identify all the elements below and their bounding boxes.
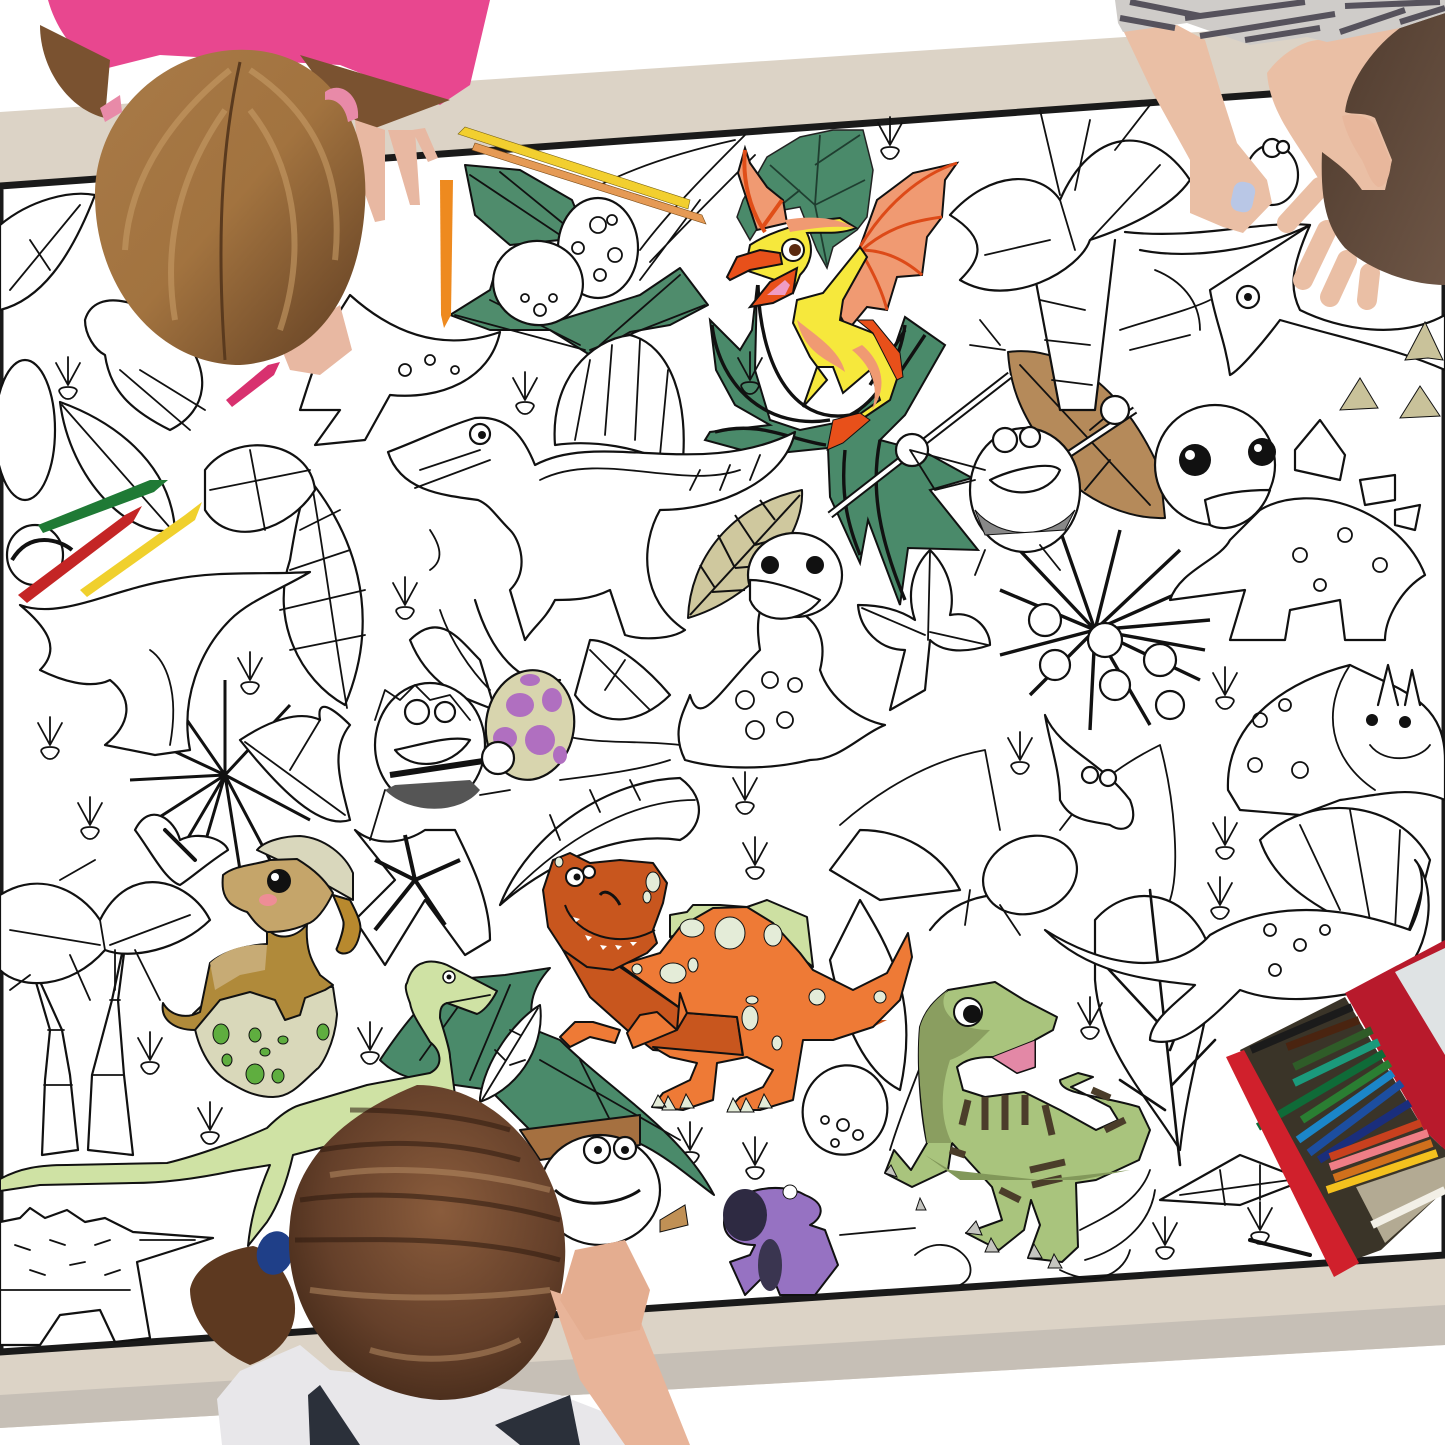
ponytail xyxy=(190,1246,295,1365)
caveman with paintbrush right xyxy=(830,375,1135,575)
plant: spiky burst with berries xyxy=(1000,530,1210,730)
baby stegosaurus xyxy=(1155,405,1425,640)
box interior xyxy=(1240,997,1445,1265)
plant: palm tree left xyxy=(0,860,210,1155)
arms xyxy=(560,1022,620,1047)
claws xyxy=(652,1094,772,1112)
plant: large green leaf top xyxy=(737,130,873,268)
green long-neck dinosaur xyxy=(0,962,497,1246)
back spikes xyxy=(670,900,813,967)
footprints xyxy=(38,117,1443,1259)
caveman with paintbrush centre xyxy=(370,683,514,840)
baby long-neck dinosaur xyxy=(679,533,885,768)
plant: brown leaf xyxy=(1008,351,1165,518)
box lid xyxy=(1345,940,1445,1150)
shirt xyxy=(217,1345,655,1445)
green leaves behind long-neck xyxy=(380,968,714,1195)
purple dinosaur xyxy=(723,1185,838,1295)
box front xyxy=(1226,1050,1359,1277)
white leaf on green plant xyxy=(480,1005,541,1102)
hatchling in egg xyxy=(163,836,361,1097)
coloured pencils left xyxy=(18,362,280,603)
outline pterosaur top right xyxy=(1210,139,1445,375)
arm and hand xyxy=(1123,25,1272,233)
green raptor xyxy=(885,982,1150,1268)
plant: spiky burst left xyxy=(130,680,350,885)
hair xyxy=(1322,13,1445,285)
hair xyxy=(289,1085,565,1400)
plant: central green leaves xyxy=(705,285,978,605)
head xyxy=(543,853,667,970)
spinosaurus xyxy=(388,335,795,640)
caveman bottom centre xyxy=(520,1115,688,1245)
triceratops xyxy=(1228,665,1445,815)
child: top-right xyxy=(1115,0,1445,300)
long pencil pair xyxy=(440,127,706,328)
belly and neck xyxy=(563,950,743,1057)
ear xyxy=(1342,115,1391,187)
egg with purple spots xyxy=(479,664,581,786)
plant: tan fern leaf xyxy=(688,490,802,618)
body xyxy=(620,907,912,1110)
child: top-left girl xyxy=(40,0,490,375)
plant: maple leaf centre xyxy=(410,550,990,780)
orange pterodactyl xyxy=(727,148,957,450)
face and neck xyxy=(1267,28,1445,215)
outline egg xyxy=(790,1053,900,1167)
outline t-rex left xyxy=(7,525,310,755)
outline dinosaur top left xyxy=(0,295,500,500)
shirt xyxy=(1115,0,1445,45)
plant: striped leaf left xyxy=(0,194,365,708)
pterodactyl wing xyxy=(837,163,957,330)
plesiosaur xyxy=(1045,860,1429,1042)
outline ankylosaur bottom left xyxy=(0,1208,213,1345)
fingers xyxy=(1287,187,1370,300)
child: bottom xyxy=(190,1085,690,1445)
scrunchie xyxy=(252,1227,298,1279)
plant: big striped frond centre xyxy=(355,778,699,965)
orange t-rex xyxy=(543,853,912,1112)
outline pterosaur centre right xyxy=(840,715,1175,935)
crayon box xyxy=(1226,940,1445,1277)
plant: lower right leaves xyxy=(830,808,1430,1285)
plant: palm tree top right xyxy=(950,105,1310,410)
spots xyxy=(555,857,886,1050)
arm xyxy=(550,1290,690,1445)
plant: top-centre leaves with eggs xyxy=(450,135,755,355)
